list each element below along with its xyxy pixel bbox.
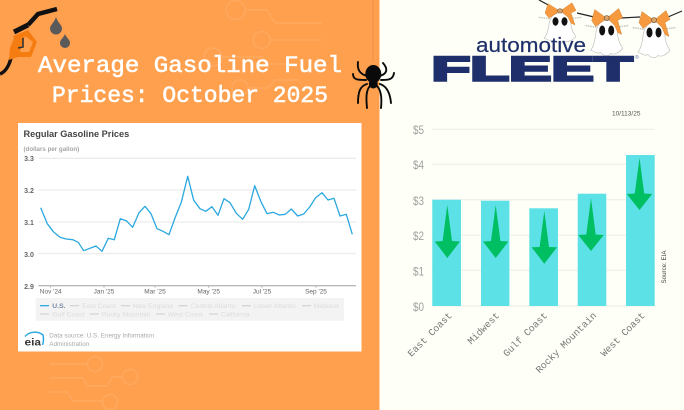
data source note: [49, 333, 154, 348]
grid lines: [432, 129, 655, 306]
logo: automotive fleet: FLEET: [432, 50, 633, 88]
icon: ghost middle: [585, 8, 629, 56]
legend: East Coast: [82, 303, 116, 310]
decorative circuit lines: top: [204, 0, 322, 96]
line: U.S. regular gasoline price: [41, 176, 352, 251]
region labels: Rocky Mountain: [534, 310, 599, 376]
logo: automotive fleet: [432, 34, 639, 88]
icon: fuel pump nozzle: [0, 9, 57, 74]
region labels: Midwest: [466, 310, 502, 347]
icon: ghost left: [538, 3, 582, 43]
title line 2: Prices: October 2025: [52, 83, 328, 110]
icon: fuel drops: [50, 17, 70, 48]
legend: California: [221, 312, 250, 318]
dollar axis labels: $2: [413, 229, 424, 243]
title: Average Gasoline Fuel: [38, 53, 342, 80]
legend: West Coast: [168, 312, 203, 318]
icon: spider on thread: [353, 0, 394, 108]
data source note: Data source: U.S. Energy Information: [49, 333, 154, 340]
legend: U.S.: [52, 303, 66, 310]
EIA logo: eia: [24, 338, 42, 348]
region labels: West Coast: [599, 310, 648, 359]
region labels: [406, 310, 648, 376]
y axis labels: 3.0: [24, 252, 34, 259]
y axis labels: 3.3: [24, 156, 34, 163]
logo: automotive fleet: automotive: [476, 34, 586, 57]
grid lines: [38, 158, 356, 254]
source note: Source: EIA: [661, 250, 668, 284]
dollar axis labels: $3: [413, 194, 424, 208]
region labels: East Coast: [406, 310, 455, 359]
panel: orange left background: [0, 0, 380, 410]
x axis labels: Sep '25: [305, 288, 327, 296]
y axis labels: 3.1: [24, 220, 34, 227]
dollar axis labels: [413, 123, 424, 314]
EIA logo: [24, 332, 44, 348]
bars: [432, 155, 655, 306]
icon: ghost right: [632, 10, 676, 58]
legend: New England: [133, 303, 173, 310]
x axis labels: Mar '25: [144, 288, 166, 296]
chart unit label: (dollars per gallon): [24, 146, 79, 153]
decorative circuit lines: bottom: [50, 356, 138, 410]
x axis labels: May '25: [197, 288, 220, 296]
legend: Midwest: [314, 303, 339, 310]
date note: 10/113/25: [612, 110, 641, 118]
x axis labels: Jul '25: [253, 288, 272, 296]
legend: Gulf Coast: [52, 312, 85, 318]
bar chart: regional prices: [406, 123, 655, 376]
logo: automotive fleet: ®: [635, 54, 639, 61]
x axis: [38, 286, 356, 288]
panel: cream right background: [380, 0, 684, 410]
y axis labels: 2.9: [24, 284, 34, 291]
x axis labels: [40, 288, 327, 296]
legend: [36, 298, 344, 321]
ghost garland string: [539, 0, 682, 18]
dollar axis labels: $1: [413, 264, 424, 278]
panel: line chart card: [18, 123, 362, 352]
region labels: Gulf Coast: [501, 310, 550, 359]
down arrows: [435, 158, 652, 264]
data source note: Administration: [49, 341, 90, 348]
legend: Rocky Mountain: [102, 312, 151, 318]
y axis labels: [24, 156, 34, 291]
legend: Central Atlantic: [191, 303, 237, 310]
dollar axis labels: $5: [413, 123, 424, 137]
x axis labels: Nov '24: [40, 288, 62, 296]
y axis labels: 3.2: [24, 188, 34, 195]
legend: Lower Atlantic: [254, 303, 297, 310]
chart heading: Regular Gasoline Prices: [24, 129, 129, 139]
dollar axis labels: $4: [413, 158, 424, 172]
dollar axis labels: $0: [413, 300, 424, 314]
x axis labels: Jan '25: [94, 288, 115, 296]
